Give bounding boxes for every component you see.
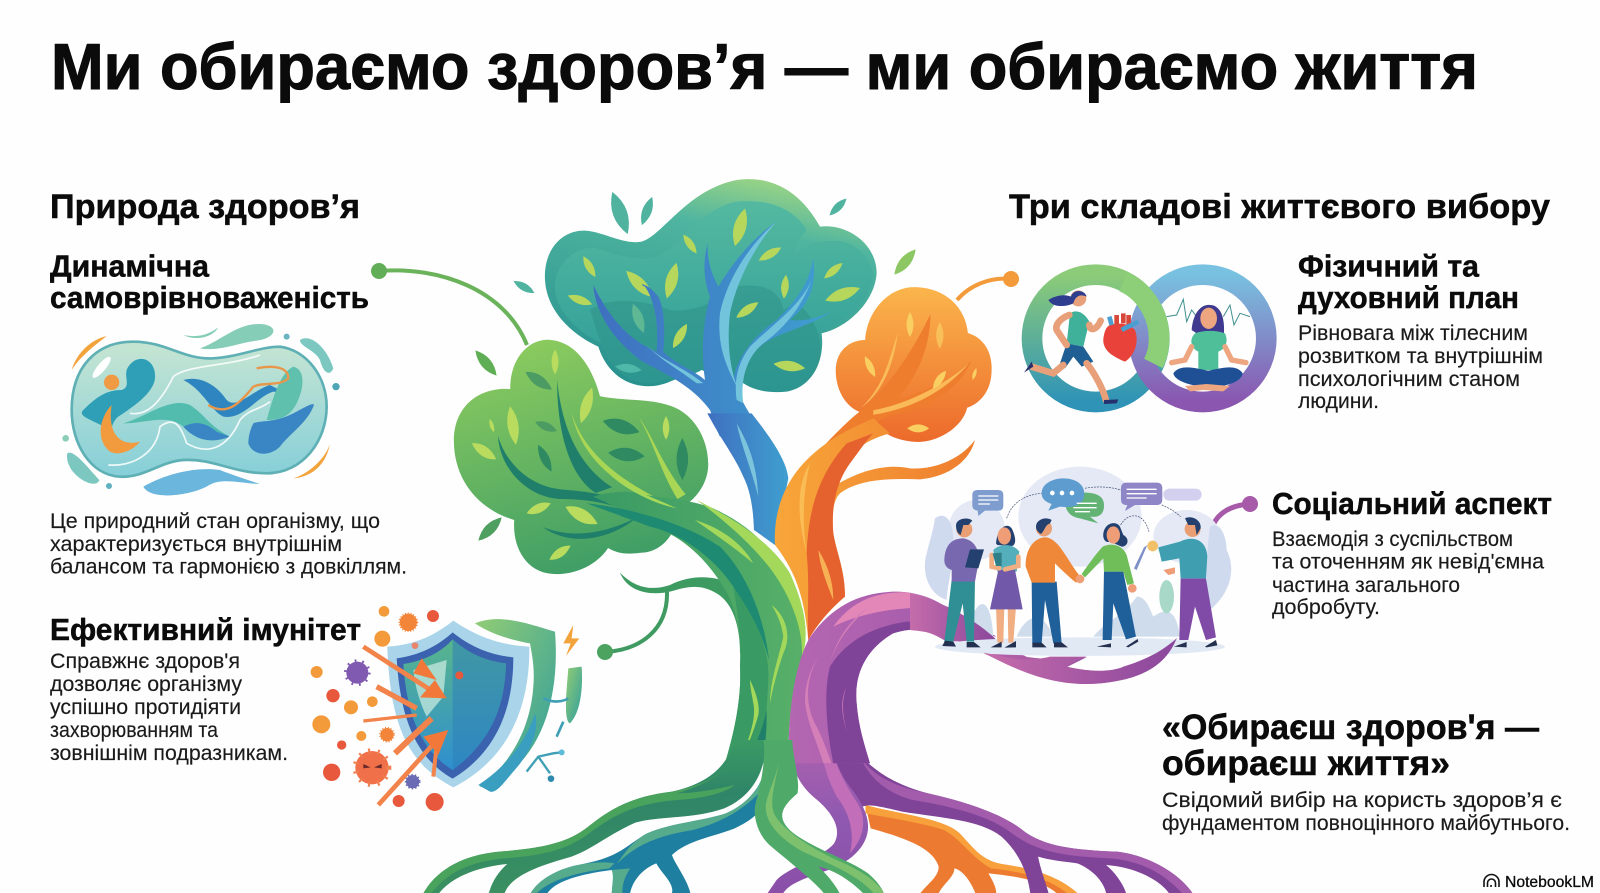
paragraph: quote <box>1162 788 1570 835</box>
roots: orange, purple <box>768 740 1192 893</box>
heading: social aspect: Соціальний аспект <box>1272 486 1552 521</box>
person 2 <box>990 526 1023 648</box>
paragraph: natural state <box>50 509 407 578</box>
backdrop blobs <box>925 467 1231 637</box>
branches <box>593 222 832 437</box>
crown: left green <box>454 340 708 574</box>
connector: left top <box>371 263 527 345</box>
title: Ми обираємо здоров’я — ми обираємо життя <box>51 30 1478 103</box>
paragraph: immunity: дозволяє організму <box>50 672 242 696</box>
left heading: Природа здоров’я <box>50 188 360 226</box>
connector: right top <box>957 271 1019 300</box>
section: dynamic self-balance heading <box>50 248 369 315</box>
heading: physical and spiritual: Фізичний та <box>1298 248 1480 284</box>
heading: physical and spiritual: духовний план <box>1298 280 1519 315</box>
section: dynamic self-balance heading: самоврівноваженість <box>50 280 369 315</box>
icon: body and spirit infinity <box>1024 275 1266 404</box>
paragraph: social aspect <box>1272 527 1544 619</box>
person 4 <box>1082 523 1138 647</box>
pathogens <box>311 606 390 741</box>
paragraph: physical and spiritual: людини. <box>1298 389 1379 413</box>
paragraph: social aspect: Взаємодія з суспільством <box>1272 527 1513 551</box>
icon: balance cell <box>62 324 340 495</box>
paragraph: physical and spiritual: психологічним станом <box>1298 367 1520 391</box>
connector: right social <box>1213 496 1258 525</box>
paragraph: immunity: успішно протидіяти <box>50 695 241 719</box>
paragraph: immunity: захворюванням та <box>50 718 218 742</box>
main shield <box>387 621 529 787</box>
roots: green and blue <box>424 740 884 893</box>
paragraph: immunity <box>50 649 288 765</box>
quote heading <box>1162 708 1539 783</box>
paragraph: natural state: балансом та гармонією з довкіллям. <box>50 554 407 578</box>
paragraph: physical and spiritual: розвитком та внутрішнім <box>1298 344 1543 368</box>
green trunk <box>587 475 806 763</box>
person 1 <box>942 519 984 647</box>
paragraph: social aspect: частина загального <box>1272 573 1460 597</box>
heading: physical and spiritual <box>1298 248 1519 315</box>
outer green shield <box>475 619 556 787</box>
paragraph: social aspect: добробуту. <box>1272 595 1380 619</box>
section: dynamic self-balance heading: Динамічна <box>50 248 210 284</box>
floating leaves <box>471 189 920 544</box>
runner <box>1024 290 1118 404</box>
paragraph: immunity: зовнішнім подразникам. <box>50 741 288 765</box>
leaves <box>566 207 862 374</box>
quote heading: обираєш життя» <box>1162 744 1450 783</box>
paragraph: immunity: Справжнє здоров'я <box>50 649 240 673</box>
tree illustration <box>371 179 1258 893</box>
decor: outer droplets <box>62 324 340 495</box>
heading: effective immunity: Ефективний імунітет <box>50 612 361 647</box>
crown: top teal <box>545 179 877 437</box>
heart <box>1103 313 1138 362</box>
quote heading: «Обираєш здоров'я — <box>1162 708 1539 747</box>
paragraph: natural state: характеризується внутрішнім <box>50 532 342 556</box>
person 3 <box>1026 518 1084 647</box>
right heading: Три складові життєвого вибору <box>1009 188 1550 226</box>
watermark: NotebookLM: NotebookLM <box>1505 874 1594 891</box>
heartbeat line <box>1167 299 1250 325</box>
paragraph: physical and spiritual: Рівновага між тілесним <box>1298 321 1528 345</box>
paragraph: social aspect: та оточенням як невід'ємна <box>1272 550 1544 574</box>
paragraph: natural state: Це природний стан організму, що <box>50 509 380 533</box>
purple trunk <box>788 592 997 763</box>
icon: people socializing <box>910 467 1231 684</box>
icon: immunity shield <box>311 606 582 811</box>
paragraph: quote: фундаментом повноцінного майбутнього. <box>1162 811 1570 835</box>
connector: left bottom <box>597 592 667 660</box>
orange crown and trunk <box>775 287 992 640</box>
purple branch to people <box>910 593 1177 684</box>
leaves <box>470 349 688 564</box>
meditating person <box>1172 305 1246 391</box>
paragraph: quote: Свідомий вибір на користь здоров’я є <box>1162 788 1562 812</box>
attack arrows <box>363 647 440 805</box>
person 5 <box>1134 517 1217 647</box>
blue trunk <box>707 413 788 545</box>
speech bubbles <box>972 478 1202 532</box>
paragraph: physical and spiritual <box>1298 321 1543 413</box>
